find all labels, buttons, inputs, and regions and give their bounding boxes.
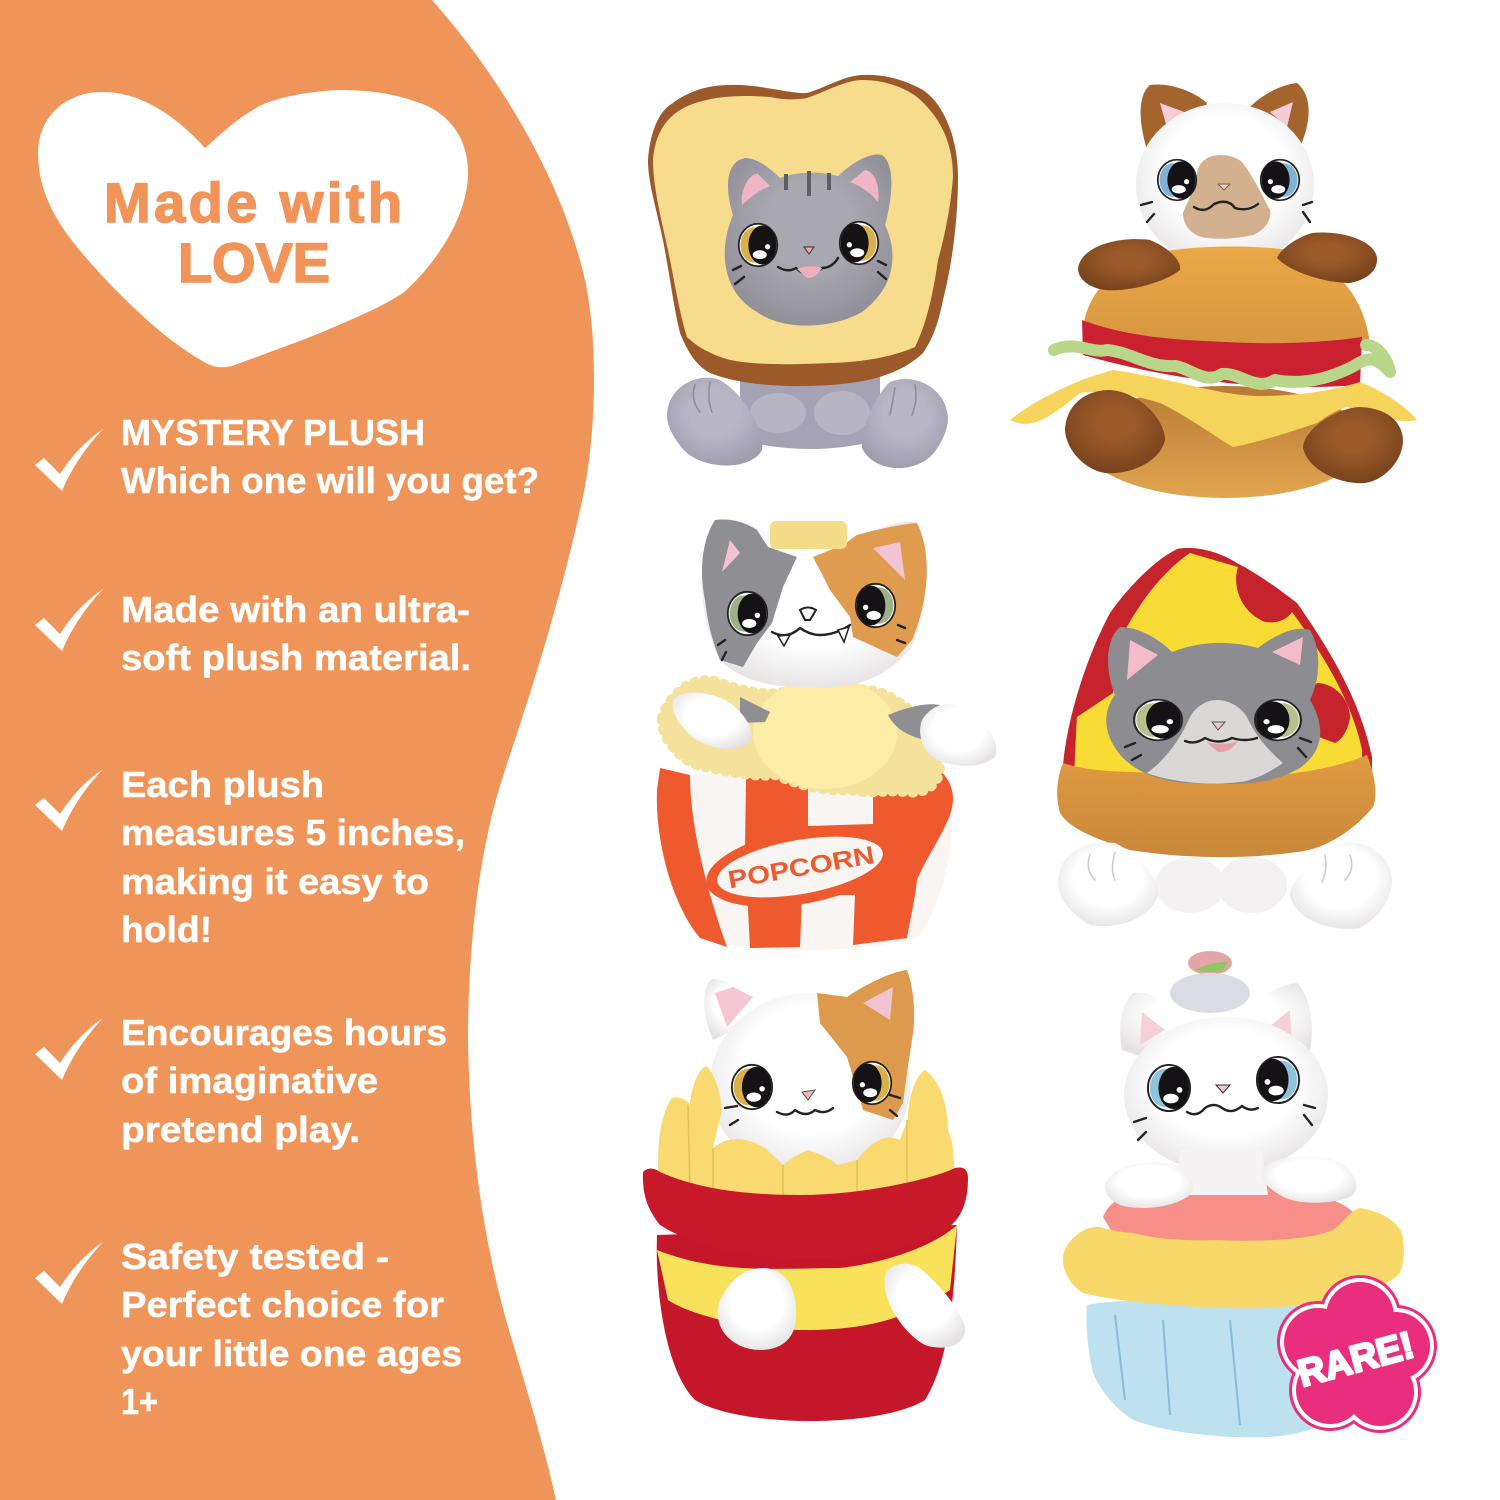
feature: ultra-soft material: soft plush material. <box>121 637 471 678</box>
popcorn label <box>700 814 900 920</box>
ears <box>1141 83 1309 150</box>
yellow ring <box>1063 1208 1404 1308</box>
lettuce <box>1054 345 1390 384</box>
orange patch and ear <box>817 970 914 1120</box>
paws <box>718 1268 796 1350</box>
feature: 5 inches: Each plush <box>121 764 324 805</box>
feature: safety tested: Safety tested - <box>121 1236 389 1277</box>
feature: ultra-soft material <box>35 589 471 678</box>
feature list <box>35 412 539 1422</box>
ears <box>1120 983 1312 1060</box>
cheese <box>1073 553 1362 790</box>
crust <box>648 75 958 386</box>
tub stripes <box>657 768 953 948</box>
yellow stripe <box>657 1225 957 1330</box>
rare badge: RARE! <box>1294 1324 1418 1396</box>
paws <box>1105 1162 1193 1208</box>
strawberry <box>1188 951 1232 975</box>
cat face <box>725 155 892 326</box>
feature: imaginative play: Encourages hours <box>121 1012 447 1053</box>
tub <box>657 770 953 950</box>
feature: mystery plush: MYSTERY PLUSH <box>121 412 425 453</box>
heart badge with heading <box>38 90 468 367</box>
heading: Made with: Made with <box>104 171 402 234</box>
macaron <box>1170 973 1250 1013</box>
feature: mystery plush: Which one will you get? <box>121 460 539 501</box>
heading: LOVE: LOVE <box>178 231 330 294</box>
body and legs <box>740 370 880 449</box>
butter <box>770 521 847 549</box>
fries crown <box>658 1066 954 1195</box>
cat head <box>1106 627 1320 784</box>
orange patch <box>813 523 927 657</box>
frosting <box>1103 1177 1357 1245</box>
feature: 5 inches: hold! <box>121 909 212 950</box>
cupcake liner <box>1086 1300 1325 1437</box>
plush: popcorn cat <box>657 519 996 950</box>
feature: safety tested: 1+ <box>121 1381 158 1422</box>
orange wavy background panel <box>0 0 594 1500</box>
bread face <box>653 80 953 364</box>
right pepperoni <box>1300 683 1350 743</box>
plush: cupcake cat <box>1063 951 1437 1437</box>
rare badge <box>1277 1275 1437 1433</box>
feet <box>1065 390 1165 473</box>
cheese <box>1010 370 1417 447</box>
crust <box>1057 755 1375 857</box>
feet <box>1155 857 1225 913</box>
feature: 5 inches: measures 5 inches, <box>121 812 465 853</box>
plush: pizza cat <box>1057 548 1392 929</box>
head <box>1124 1017 1328 1173</box>
pizza slice red base <box>1063 548 1372 790</box>
popcorn fluff <box>662 680 940 793</box>
gray patch <box>702 519 797 667</box>
ketchup band <box>1082 320 1362 387</box>
arms <box>740 697 770 723</box>
plush: burger cat <box>1010 83 1417 498</box>
popcorn label: POPCORN <box>726 841 876 894</box>
head <box>701 520 927 688</box>
feature: imaginative play: of imaginative <box>121 1060 378 1101</box>
feature: imaginative play: pretend play. <box>121 1109 360 1150</box>
arms <box>1078 239 1180 290</box>
plush: toast cat <box>648 75 958 468</box>
head <box>1136 103 1314 267</box>
plush: fries cat <box>643 970 968 1421</box>
feature: imaginative play <box>35 1012 447 1150</box>
top bun <box>1083 246 1370 359</box>
feature: 5 inches <box>35 764 465 950</box>
feature: safety tested: your little one ages <box>121 1333 462 1374</box>
bottom bun <box>1083 386 1367 498</box>
feature: safety tested <box>35 1236 462 1422</box>
red sleeve <box>643 1167 968 1258</box>
feature: mystery plush <box>35 412 539 501</box>
cup base <box>657 1225 957 1421</box>
feature: ultra-soft material: Made with an ultra- <box>121 589 470 630</box>
feature: 5 inches: making it easy to <box>121 861 429 902</box>
feature: safety tested: Perfect choice for <box>121 1284 444 1325</box>
ears and head <box>704 979 775 1040</box>
